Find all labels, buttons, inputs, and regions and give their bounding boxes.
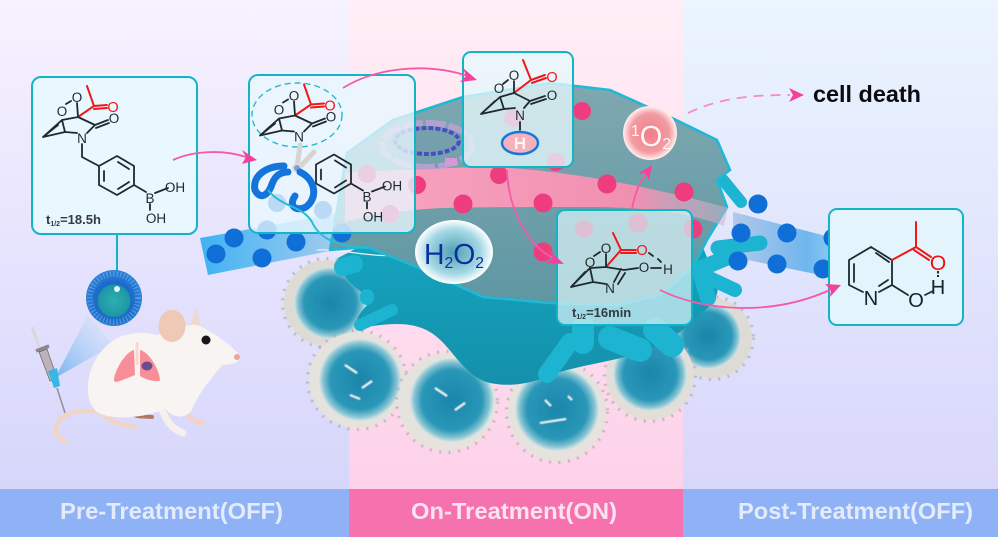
pink reactive dots (358, 102, 702, 262)
molecule: boronic acid prodrug: O (109, 111, 119, 126)
bubble: hydrogen peroxide (415, 220, 493, 284)
molecule: cleaved boronic acid prodrug: B (362, 190, 372, 204)
half-life label: =18.5h (60, 212, 101, 227)
label: cell death: cell death (813, 81, 921, 107)
light cone: syringe to nanoparticle (55, 315, 113, 378)
molecule: boronic acid prodrug: O (107, 100, 119, 116)
molecule: cleaved boronic acid prodrug (260, 84, 402, 224)
cell 4 (507, 362, 607, 462)
molecule: boronic acid prodrug: OH (165, 180, 185, 195)
molecule: boronic acid prodrug (43, 86, 185, 226)
molecule: cleaved boronic acid prodrug: O (289, 88, 299, 104)
molecule: cleaved boronic acid prodrug: OH (363, 210, 383, 224)
immune cells cluster under the tumour cell (283, 259, 753, 462)
molecule: cleaved boronic acid prodrug: O (324, 98, 336, 114)
tumour cell: upper surface (330, 83, 730, 305)
bar: Post-Treatment: Post-Treatment(OFF) (738, 498, 973, 524)
icon: nanoparticle carrier (86, 270, 142, 326)
molecule: cleaved boronic acid prodrug: O (274, 102, 284, 118)
bubble: hydrogen peroxide: O (453, 239, 475, 271)
molecule: acetyl hydroxypyridine: N (864, 288, 878, 310)
bar: Pre-Treatment: Pre-Treatment(OFF) (60, 498, 283, 524)
molecule: enol intermediate: O (636, 243, 648, 259)
arrow: enol intermediate to singlet oxygen (632, 165, 652, 210)
arrow: singlet oxygen to cell death (688, 88, 804, 113)
dashed highlight around warhead (252, 83, 342, 147)
bubble: singlet oxygen: 1 (631, 123, 640, 140)
bubble: singlet oxygen: 2 (662, 136, 671, 153)
molecule: boronic acid prodrug: O (57, 104, 67, 119)
half-life label: 1/2 (50, 221, 60, 228)
bubble: singlet oxygen (623, 106, 677, 160)
cell 3 (397, 352, 497, 452)
molecule: boronic acid prodrug: B (145, 191, 155, 206)
mouse legs (100, 400, 203, 427)
cell 2 (308, 331, 406, 429)
bar: Pre-Treatment (0, 489, 349, 537)
bubble: singlet oxygen: O (640, 121, 662, 153)
band: pink prodrug flow through the cell (345, 167, 728, 226)
lungs (114, 342, 160, 382)
molecule: N-H intermediate: O (509, 68, 519, 83)
bubble: hydrogen peroxide: 2 (475, 255, 484, 272)
far hind leg (130, 412, 152, 417)
molecule: boronic acid prodrug: O (72, 90, 82, 105)
arrow: enol intermediate to pyridine product (660, 284, 841, 308)
panel: released pyridine product (829, 209, 963, 325)
molecule: enol intermediate (571, 233, 673, 296)
cell 1 (283, 259, 371, 347)
bar: Post-Treatment (683, 489, 998, 537)
panel: rearranged enol intermediate, half life 16 min (557, 210, 692, 325)
arrow: N-H intermediate to enol intermediate (507, 170, 564, 264)
molecule: N-H intermediate: N (515, 108, 525, 123)
mouse ear far (190, 307, 201, 327)
molecule: boronic acid prodrug: N (77, 131, 87, 146)
molecule: acetyl hydroxypyridine: H (931, 277, 945, 299)
molecule: enol intermediate: H (663, 262, 673, 277)
arrow: cleavage to N-H intermediate (343, 68, 477, 88)
arrow: prodrug to cell entry (173, 150, 257, 164)
molecule: cleaved boronic acid prodrug: O (326, 110, 336, 124)
half-life label: 1/2 (576, 314, 586, 321)
cell 5 (605, 331, 695, 421)
molecule: enol intermediate: N (605, 281, 615, 296)
organelle: golgi ring (382, 123, 472, 167)
bar: On-Treatment (349, 489, 683, 537)
bubble: hydrogen peroxide: 2 (444, 255, 453, 272)
molecule: cleaved boronic acid prodrug: OH (382, 178, 402, 194)
cell 6 (671, 297, 753, 379)
mouse tail (56, 411, 95, 442)
half-life label: =16min (586, 305, 631, 320)
mouse eye and nose (202, 336, 210, 344)
molecule: enol intermediate: O (585, 255, 595, 270)
tumour cell: lower teal body with pseudopods (317, 180, 760, 385)
molecule: N-H intermediate: O (546, 70, 558, 86)
panel: prodrug with linker cleavage in the cell (249, 75, 415, 248)
bar: On-Treatment: On-Treatment(ON) (411, 498, 617, 524)
molecule: acetyl hydroxypyridine: O (908, 290, 924, 312)
molecule: enol intermediate: O (601, 241, 611, 256)
half-life label: t (46, 212, 50, 227)
band: blue flow leaving the cell (733, 212, 866, 277)
band: blue flow entering the cell (200, 212, 345, 275)
hydrogen badge: H (514, 134, 526, 153)
panel: deprotected intermediate with N-H (463, 52, 573, 167)
molecule: boronic acid prodrug: OH (146, 211, 166, 226)
icon: scissors (255, 145, 368, 248)
half-life label: t (572, 305, 576, 320)
molecule: N-H intermediate: O (547, 88, 557, 103)
bubble: hydrogen peroxide: H (424, 239, 445, 271)
mouse body (88, 325, 240, 417)
connector: prodrug to nanoparticle (116, 234, 118, 290)
mouse ear near (158, 310, 186, 342)
illustration: mouse with lung tumour (56, 307, 240, 442)
panel: prodrug structure, half life 18.5h (32, 77, 197, 234)
molecule: enol intermediate: O (639, 260, 649, 275)
mouse foreleg (160, 405, 183, 433)
molecule: cleaved boronic acid prodrug: N (294, 130, 304, 144)
blue prodrug dots (206, 194, 842, 278)
molecule: N-H intermediate: O (494, 81, 504, 96)
molecule: N-H intermediate (481, 60, 558, 130)
molecule: acetyl hydroxypyridine (849, 222, 946, 312)
molecule: acetyl hydroxypyridine: O (930, 252, 946, 275)
icon: syringe (32, 327, 65, 413)
